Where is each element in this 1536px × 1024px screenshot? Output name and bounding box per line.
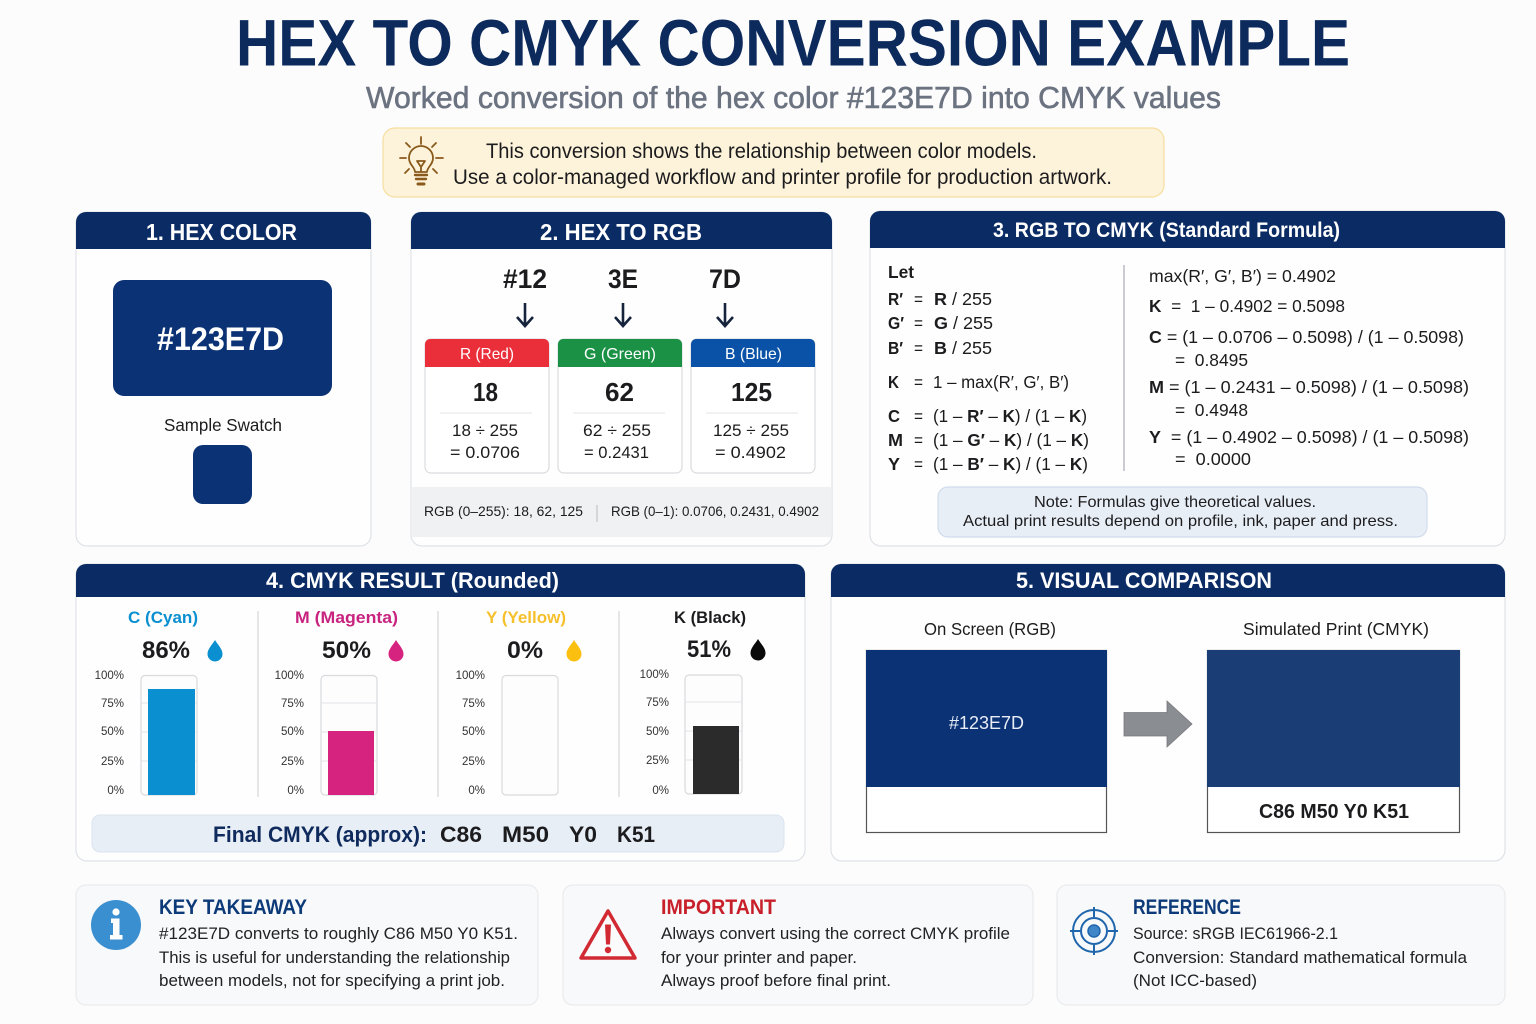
formula definitions: =	[914, 338, 923, 358]
simulated print sample	[1207, 619, 1460, 832]
on screen sample: #123E7D	[949, 713, 1024, 733]
gauge: yellow: 50%	[462, 726, 485, 738]
card: key takeaway: between models, not for specifying a print job.	[159, 971, 505, 990]
card: reference: Conversion: Standard mathematical formula	[1133, 948, 1468, 967]
worked calculation	[1149, 266, 1469, 469]
card: key takeaway: This is useful for understanding the relationship	[159, 948, 510, 967]
card: important: IMPORTANT	[661, 896, 776, 919]
gauge: cyan: 50%	[101, 726, 124, 738]
title: HEX TO CMYK CONVERSION EXAMPLE	[236, 6, 1350, 80]
heading: visual comparison: 5. VISUAL COMPARISON	[1016, 568, 1272, 593]
gauge: magenta: 25%	[281, 756, 304, 768]
worked calculation: = 0.4948	[1175, 400, 1248, 420]
formula definitions: M	[888, 430, 903, 450]
note box	[938, 487, 1427, 537]
formula definitions: (1 – B′ – K) / (1 – K)	[933, 454, 1088, 474]
formula definitions: =	[914, 454, 923, 474]
formula definitions: B′	[888, 338, 903, 358]
gauge: magenta: 0%	[287, 785, 304, 797]
card: blue: 125	[731, 377, 772, 407]
panel: 4. cmyk result	[76, 564, 805, 861]
gauge: cyan: 25%	[101, 756, 124, 768]
note box: Note: Formulas give theoretical values.	[1034, 494, 1316, 511]
card: blue: B (Blue)	[725, 346, 782, 363]
formula definitions: Y	[888, 454, 900, 474]
subtitle: Worked conversion of the hex color #123E7D into CMYK values	[366, 80, 1221, 115]
panel: 1. hex color	[76, 212, 371, 546]
card: important: Always proof before final print.	[661, 971, 891, 990]
callout: color model note: This conversion shows the relationship between color models.	[486, 140, 1037, 163]
formula definitions: (1 – G′ – K) / (1 – K)	[933, 430, 1089, 450]
card: red: R (Red)	[460, 346, 514, 363]
gauge: black: 51%	[687, 636, 731, 663]
gauge: magenta: 75%	[281, 698, 304, 710]
on screen sample	[866, 619, 1107, 832]
formula definitions: =	[914, 406, 923, 426]
gauge: black	[640, 608, 766, 797]
worked calculation: M = (1 – 0.2431 – 0.5098) / (1 – 0.5098)	[1149, 377, 1469, 397]
icon: light bulb	[400, 137, 443, 184]
card: red: = 0.0706	[450, 443, 520, 462]
gauge: magenta	[275, 608, 404, 797]
callout: color model note	[383, 128, 1164, 197]
callout: color model note: Use a color-managed workflow and printer profile for production artwork.	[453, 166, 1112, 189]
card: green: = 0.2431	[584, 443, 649, 462]
formula definitions: B / 255	[934, 338, 992, 358]
gauge: yellow: 75%	[462, 698, 485, 710]
final cmyk bar: K51	[617, 822, 655, 847]
simulated print sample: Simulated Print (CMYK)	[1243, 619, 1429, 639]
gauge: cyan: C (Cyan)	[128, 608, 198, 627]
card: key takeaway: KEY TAKEAWAY	[159, 896, 307, 919]
rgb summary band	[412, 487, 831, 537]
gauge: cyan: 75%	[101, 698, 124, 710]
panel: 3. rgb to cmyk	[870, 211, 1505, 546]
hex pairs with arrows: 3E	[608, 264, 638, 294]
gauge: black: 25%	[646, 755, 669, 767]
heading: rgb to cmyk: 3. RGB TO CMYK (Standard Formula)	[993, 219, 1340, 242]
formula definitions: =	[914, 289, 923, 309]
worked calculation: Y = (1 – 0.4902 – 0.5098) / (1 – 0.5098)	[1149, 427, 1469, 447]
formula definitions: =	[914, 313, 923, 333]
worked calculation: = 0.0000	[1175, 449, 1251, 469]
final cmyk bar	[92, 815, 784, 852]
gauge: black: 75%	[646, 697, 669, 709]
hex pairs with arrows	[503, 264, 741, 326]
card: important: for your printer and paper.	[661, 948, 857, 967]
formula definitions: =	[914, 372, 923, 392]
gauge: yellow: 100%	[456, 670, 485, 682]
formula definitions: R′	[888, 289, 903, 309]
card: reference: REFERENCE	[1133, 896, 1241, 919]
formula definitions: K	[888, 372, 899, 392]
worked calculation: C = (1 – 0.0706 – 0.5098) / (1 – 0.5098)	[1149, 327, 1464, 347]
formula definitions: Let	[888, 262, 914, 282]
gauge: yellow	[456, 608, 582, 797]
formula definitions: G / 255	[934, 313, 993, 333]
card: red: 18	[473, 377, 498, 407]
on screen sample: On Screen (RGB)	[924, 619, 1056, 639]
card: reference	[1057, 885, 1505, 1005]
small swatch	[193, 445, 252, 504]
formula definitions: C	[888, 406, 900, 426]
final cmyk bar: M50	[502, 822, 549, 847]
swatch label: Sample Swatch	[164, 415, 282, 435]
simulated print sample: C86 M50 Y0 K51	[1259, 801, 1409, 823]
worked calculation: max(R′, G′, B′) = 0.4902	[1149, 266, 1336, 286]
card: green: 62 ÷ 255	[583, 421, 651, 440]
icon: target	[1070, 907, 1118, 955]
worked calculation: K = 1 – 0.4902 = 0.5098	[1149, 296, 1345, 316]
note box: Actual print results depend on profile, ink, paper and press.	[963, 513, 1398, 530]
card: red	[425, 339, 549, 473]
card: important	[563, 885, 1033, 1005]
card: reference: Source: sRGB IEC61966-2.1	[1133, 924, 1338, 943]
formula definitions: =	[914, 430, 923, 450]
gauge: magenta: 100%	[275, 670, 304, 682]
gauge: magenta: 50%	[281, 726, 304, 738]
gauge: yellow: Y (Yellow)	[486, 608, 566, 627]
gauge: magenta: 50%	[322, 637, 371, 664]
gauge: yellow: 0%	[507, 637, 543, 664]
card: green: G (Green)	[584, 346, 656, 363]
formula definitions: G′	[888, 313, 904, 333]
rgb summary band: RGB (0–1): 0.0706, 0.2431, 0.4902	[611, 503, 819, 519]
gauge: black: 50%	[646, 726, 669, 738]
gauge: black: 100%	[640, 669, 669, 681]
icon: warning	[581, 911, 635, 958]
card: reference: (Not ICC-based)	[1133, 971, 1257, 990]
gauge: cyan: 0%	[107, 785, 124, 797]
card: blue: = 0.4902	[715, 443, 786, 462]
final cmyk bar: Final CMYK (approx):	[213, 822, 427, 847]
large swatch	[113, 280, 332, 396]
rgb summary band: RGB (0–255): 18, 62, 125	[424, 503, 583, 519]
card: green	[558, 339, 682, 473]
card: red: 18 ÷ 255	[452, 421, 518, 440]
heading: hex color: 1. HEX COLOR	[146, 219, 297, 245]
worked calculation: = 0.8495	[1175, 350, 1248, 370]
panel: 2. hex to rgb	[411, 212, 832, 546]
formula definitions: R / 255	[934, 289, 992, 309]
final cmyk bar: C86	[440, 822, 482, 847]
hex pairs with arrows: #12	[503, 264, 547, 294]
card: key takeaway	[76, 885, 538, 1005]
heading: hex to rgb: 2. HEX TO RGB	[540, 219, 702, 245]
icon: info	[91, 900, 141, 950]
card: blue: 125 ÷ 255	[713, 421, 789, 440]
formula definitions	[888, 262, 1089, 474]
gauge: yellow: 0%	[468, 785, 485, 797]
arrow: screen to print	[1124, 701, 1192, 747]
hex pairs with arrows: 7D	[709, 264, 741, 294]
gauge: cyan	[95, 608, 222, 797]
card: key takeaway: #123E7D converts to roughly C86 M50 Y0 K51.	[159, 924, 518, 943]
gauge: cyan: 86%	[142, 637, 190, 664]
gauge: magenta: M (Magenta)	[295, 608, 398, 627]
large swatch: #123E7D	[157, 321, 284, 357]
gauge: yellow: 25%	[462, 756, 485, 768]
gauge: cyan: 100%	[95, 670, 124, 682]
gauge: black: 0%	[652, 785, 669, 797]
card: important: Always convert using the correct CMYK profile	[661, 924, 1010, 943]
final cmyk bar: Y0	[569, 822, 597, 847]
card: green: 62	[605, 377, 634, 407]
formula definitions: (1 – R′ – K) / (1 – K)	[933, 406, 1087, 426]
panel: 5. visual comparison	[831, 564, 1505, 861]
gauge: black: K (Black)	[674, 608, 746, 627]
heading: cmyk result: 4. CMYK RESULT (Rounded)	[266, 568, 559, 593]
card: blue	[691, 339, 815, 473]
formula definitions: 1 – max(R′, G′, B′)	[933, 372, 1069, 392]
